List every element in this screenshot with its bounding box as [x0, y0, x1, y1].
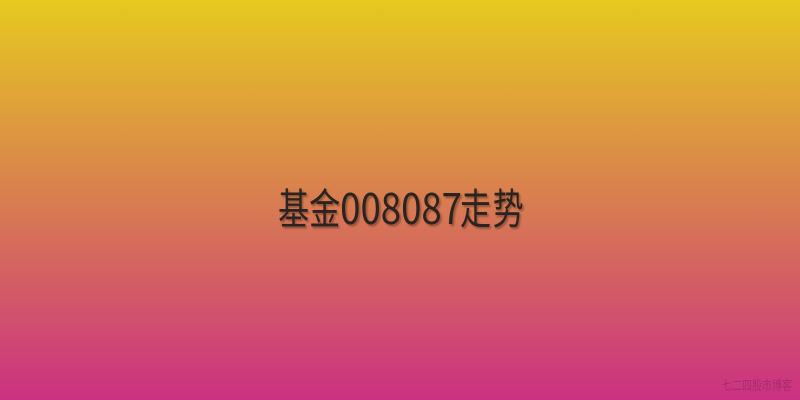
watermark: 七二四股市博客 — [722, 375, 792, 394]
title: 008087 — [340, 176, 462, 237]
title: 基金 走势 — [278, 176, 525, 237]
